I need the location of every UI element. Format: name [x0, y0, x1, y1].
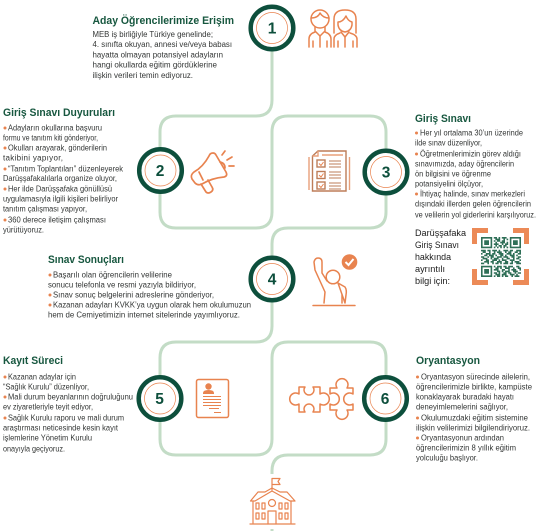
step 3 text: ilde sınav düzenliyor, — [415, 138, 482, 148]
step 2 text: yürütüyoruz. — [3, 226, 44, 234]
step 1 number: 1 — [268, 20, 277, 38]
icon: raised hand with check — [313, 254, 357, 306]
icon: application form — [196, 380, 228, 418]
step 6 — [290, 355, 533, 462]
connecting path — [160, 50, 386, 531]
step 3 text: İhtiyaç halinde, sınav merkezleri — [420, 190, 525, 198]
step 6 text: ilişkin velilerimizi bilgilendiriyoruz. — [416, 424, 530, 432]
step 6 text: öğrencilerimizle birlikte, kampüste — [416, 382, 533, 392]
step 6 text: Oryantasyonun ardından — [421, 434, 504, 442]
step 1 text — [92, 30, 232, 80]
step 2 text: Adayların okullarına başvuru — [8, 124, 102, 132]
step 2 text: “Tanıtım Toplantıları” düzenleyerek — [8, 164, 124, 174]
step 4 number: 4 — [268, 272, 277, 288]
step 4 text: Başarılı olan öğrencilerin velilerine — [53, 270, 173, 280]
step 1 text: MEB iş birliğiyle Türkiye genelinde; — [92, 30, 213, 39]
step 4 text: Kazanan adayları KVKK’ya uygun olarak hem okulumuzun — [53, 300, 251, 310]
step 3 text: potansiyelini ölçüyor, — [415, 180, 483, 188]
QR caption: hakkında — [415, 252, 451, 262]
step 3 number: 3 — [382, 164, 391, 182]
step 6 heading: Oryantasyon — [416, 355, 480, 367]
step 5 heading: Kayıt Süreci — [3, 355, 63, 367]
step 6 text: konaklayarak buradaki hayatı — [416, 392, 514, 402]
step 6 text: Oryantasyon sürecinde ailelerin, — [421, 372, 530, 382]
step 1 text: hangi okullarda eğitim gördüklerine — [92, 60, 218, 70]
step 5 number — [139, 377, 181, 420]
step 2 text: Her ilde Darüşşafaka gönüllüsü — [8, 184, 112, 194]
step 3 text: ön bilgisini ve öğrenme — [415, 170, 492, 178]
step 4 number — [251, 258, 293, 300]
step 6 number — [364, 377, 407, 420]
step 2 text — [3, 124, 124, 234]
step 6 number: 6 — [381, 391, 390, 408]
step 6 text: Okulumuzdaki eğitim sistemine — [421, 414, 529, 422]
step 4 text — [48, 270, 251, 320]
step 3 number — [365, 151, 407, 193]
step 2 text: formu ve tanıtım kiti gönderiyor, — [3, 134, 98, 142]
step 5 text: Sağlık Kurulu raporu ve mali durum — [8, 414, 124, 422]
QR caption: ayrıntılı — [415, 264, 445, 274]
step 5 text: işlemlerine Yönetim Kurulu — [3, 434, 92, 442]
step 2 number — [139, 149, 182, 192]
QR code — [472, 228, 529, 285]
step 5 text: araştırması neticesinde kesin kayıt — [3, 424, 119, 432]
step 2 heading: Giriş Sınavı Duyuruları — [3, 107, 115, 119]
QR caption: Giriş Sınavı — [415, 240, 459, 250]
step 3 text: Her yıl ortalama 30’un üzerinde — [420, 128, 524, 138]
step 2 text: 360 derece iletişim çalışması — [8, 216, 106, 224]
step 6 text — [416, 372, 533, 462]
step 1 — [92, 7, 357, 80]
step 3 text: sınavımızda, aday öğrencilerin — [415, 160, 514, 168]
step 2 text: Okulları arayarak, gönderilerin — [8, 144, 107, 152]
step 1 number — [251, 7, 293, 49]
QR caption — [415, 228, 466, 286]
step 5 text: Mali durum beyanlarının doğruluğunu — [8, 392, 133, 402]
step 1 text: hayatta olmayan potansiyel adayların — [92, 50, 223, 60]
step 5 text: ev ziyaretleriyle teyit ediyor, — [3, 402, 93, 412]
step 3 heading: Giriş Sınavı — [415, 113, 471, 125]
step 4 — [48, 254, 357, 320]
step 3 text — [415, 128, 536, 220]
icon: school building — [250, 478, 295, 524]
step 5 text: onayıyla geçiyoruz. — [3, 444, 65, 454]
step 3 text: Öğretmenlerimizin görev aldığı — [420, 150, 521, 158]
QR caption: Darüşşafaka — [415, 228, 466, 238]
step 4 text: hem de Cemiyetimizin internet sitelerinde yayımlıyoruz. — [48, 310, 240, 320]
QR caption: bilgi için: — [415, 276, 450, 286]
step 1 text: ilişkin verileri temin ediyoruz. — [92, 71, 193, 80]
step 2 number: 2 — [156, 163, 164, 180]
step 2 text: takibini yapıyor, — [3, 154, 63, 162]
icon: megaphone — [191, 151, 234, 193]
step 1 text: 4. sınıfta okuyan, annesi ve/veya babası — [92, 40, 232, 49]
step 4 text: sonucu telefonla ve resmi yazıyla bildiriyor, — [48, 280, 196, 290]
step 5 text: Kazanan adaylar için — [8, 372, 76, 382]
step 4 text: Sınav sonuç belgelerini adreslerine gönderiyor, — [53, 290, 214, 300]
step 2 text: Darüşşafakalılarla organize oluyor, — [3, 174, 117, 183]
step 2 text: tanıtım çalışması yapıyor, — [3, 204, 87, 214]
step 3 — [309, 113, 536, 286]
step 3 text: dışındaki illerden gelen öğrencilerin — [415, 200, 531, 208]
step 4 heading: Sınav Sonuçları — [48, 254, 124, 266]
step 2 — [3, 107, 234, 234]
step 6 text: yolculuğu başlıyor. — [416, 454, 478, 462]
step 5 text: “Sağlık Kurulu” düzenliyor, — [3, 382, 89, 392]
step 5 text — [3, 372, 133, 454]
icon: exam sheet — [309, 151, 350, 191]
icon: puzzle pieces — [290, 379, 353, 419]
icon: two students — [309, 10, 357, 47]
step 5 — [3, 355, 228, 454]
step 2 text: uygulamasıyla ilgili kişileri belirliyor — [3, 194, 118, 204]
step 5 number: 5 — [155, 391, 164, 408]
step 6 text: deneyimlemelerini sağlıyor, — [416, 402, 508, 412]
step 1 heading: Aday Öğrencilerimize Erişim — [92, 14, 234, 27]
step 6 text: öğrencilerimizin 8 yıllık eğitim — [416, 444, 516, 452]
